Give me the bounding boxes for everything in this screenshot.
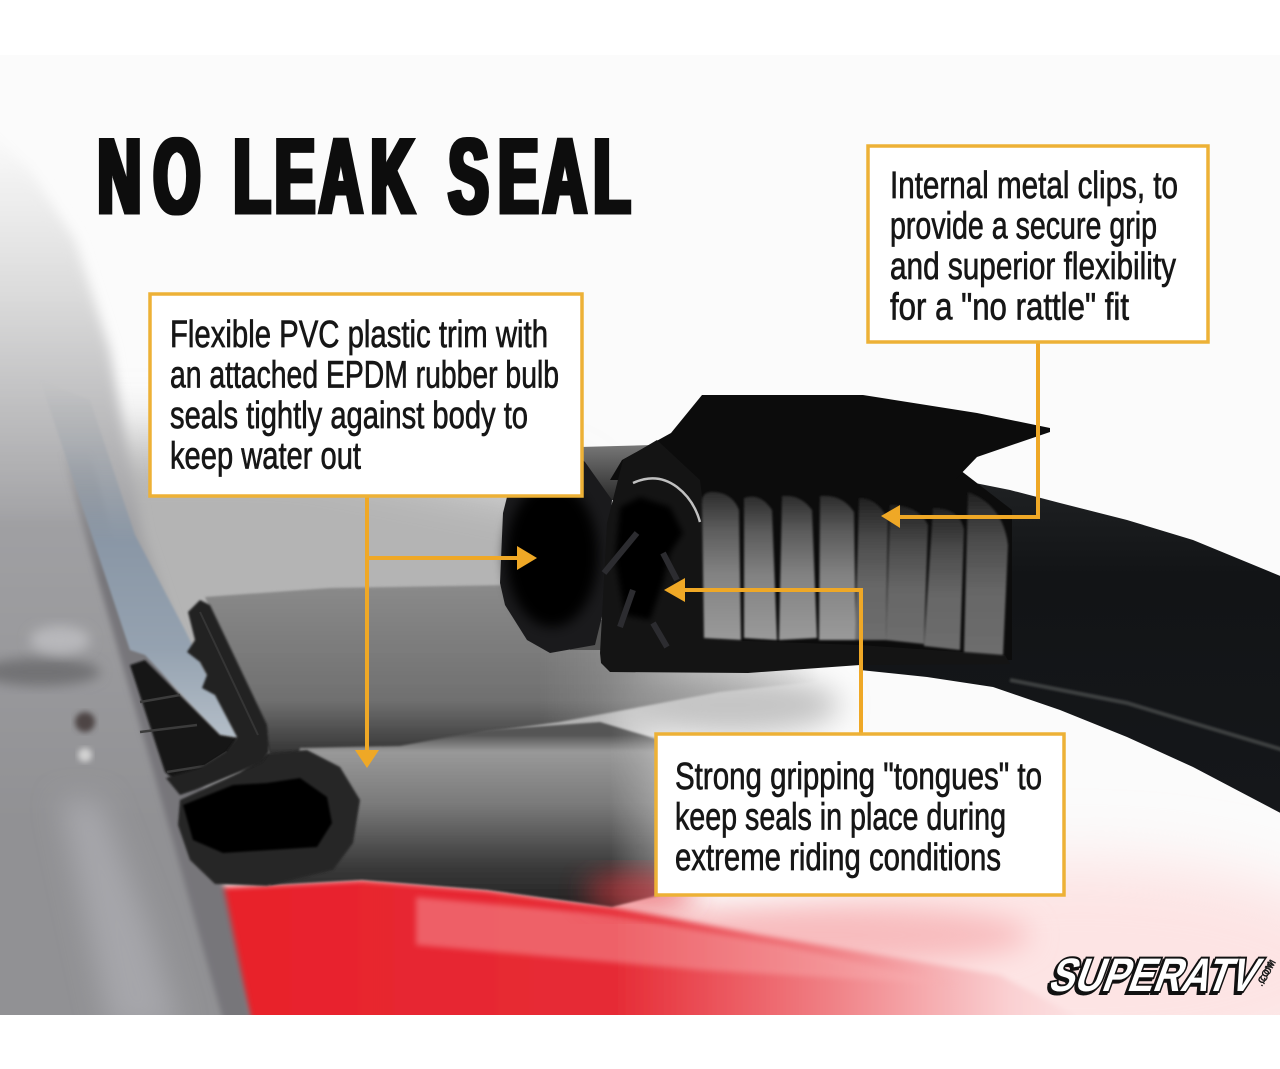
black tube bbox=[860, 480, 1280, 818]
callout box: metal clips: Internal metal clips, to bbox=[890, 165, 1178, 207]
tube sheen bbox=[1010, 680, 1280, 752]
seal bulb bbox=[500, 447, 612, 653]
callout: PVC trim leader arrows bbox=[355, 496, 537, 768]
grey seal rear bbox=[205, 582, 830, 755]
callout box: PVC trim: seals tightly against body to bbox=[170, 395, 528, 437]
grey seal front bbox=[270, 722, 660, 907]
top fin bbox=[610, 395, 1050, 500]
callout: tongues leader arrow bbox=[664, 578, 863, 734]
gripping flap bbox=[166, 600, 269, 795]
red panel highlight bbox=[413, 894, 886, 978]
metal backing bbox=[680, 470, 1012, 660]
callout box: gripping tongues bbox=[656, 734, 1064, 895]
tongues bbox=[604, 533, 677, 647]
callout box: metal clips: and superior flexibility bbox=[890, 246, 1176, 288]
blue-grey door strip bbox=[57, 424, 236, 736]
callout box: gripping tongues: keep seals in place during bbox=[675, 796, 1006, 838]
callout box: metal clips bbox=[868, 146, 1208, 342]
logo: SuperATV: .COM bbox=[1257, 958, 1279, 986]
title: NO LEAK SEAL bbox=[98, 118, 630, 236]
left window frame bbox=[0, 688, 251, 1015]
callout box: gripping tongues: Strong gripping "tongues" to bbox=[675, 756, 1042, 798]
left haze column bbox=[0, 172, 225, 790]
callout box: PVC trim: keep water out bbox=[170, 436, 361, 478]
clip opening bbox=[615, 497, 683, 620]
bulb outline bbox=[178, 750, 360, 886]
right clip section bbox=[500, 395, 1280, 818]
grey bulb top bbox=[580, 445, 652, 500]
callout box: metal clips: provide a secure grip bbox=[890, 206, 1157, 248]
bulb gap bbox=[570, 620, 610, 650]
bulb opening bbox=[183, 778, 332, 853]
metal segments bbox=[702, 492, 1008, 655]
left cross-section seal bbox=[166, 600, 360, 886]
bulb hole bbox=[506, 483, 598, 627]
body bbox=[600, 440, 1010, 673]
left seal channel bbox=[130, 660, 238, 785]
callout box: PVC trim bbox=[150, 294, 582, 496]
callout box: PVC trim: an attached EPDM rubber bulb bbox=[170, 354, 559, 396]
callout: metal clips leader arrow bbox=[881, 342, 1040, 528]
metal edge bbox=[633, 478, 700, 522]
callout box: gripping tongues: extreme riding conditions bbox=[675, 837, 1001, 879]
red body panel bbox=[220, 878, 1060, 1015]
callout box: PVC trim: Flexible PVC plastic trim with bbox=[170, 314, 548, 356]
callout box: metal clips: for a "no rattle" fit bbox=[890, 286, 1129, 328]
